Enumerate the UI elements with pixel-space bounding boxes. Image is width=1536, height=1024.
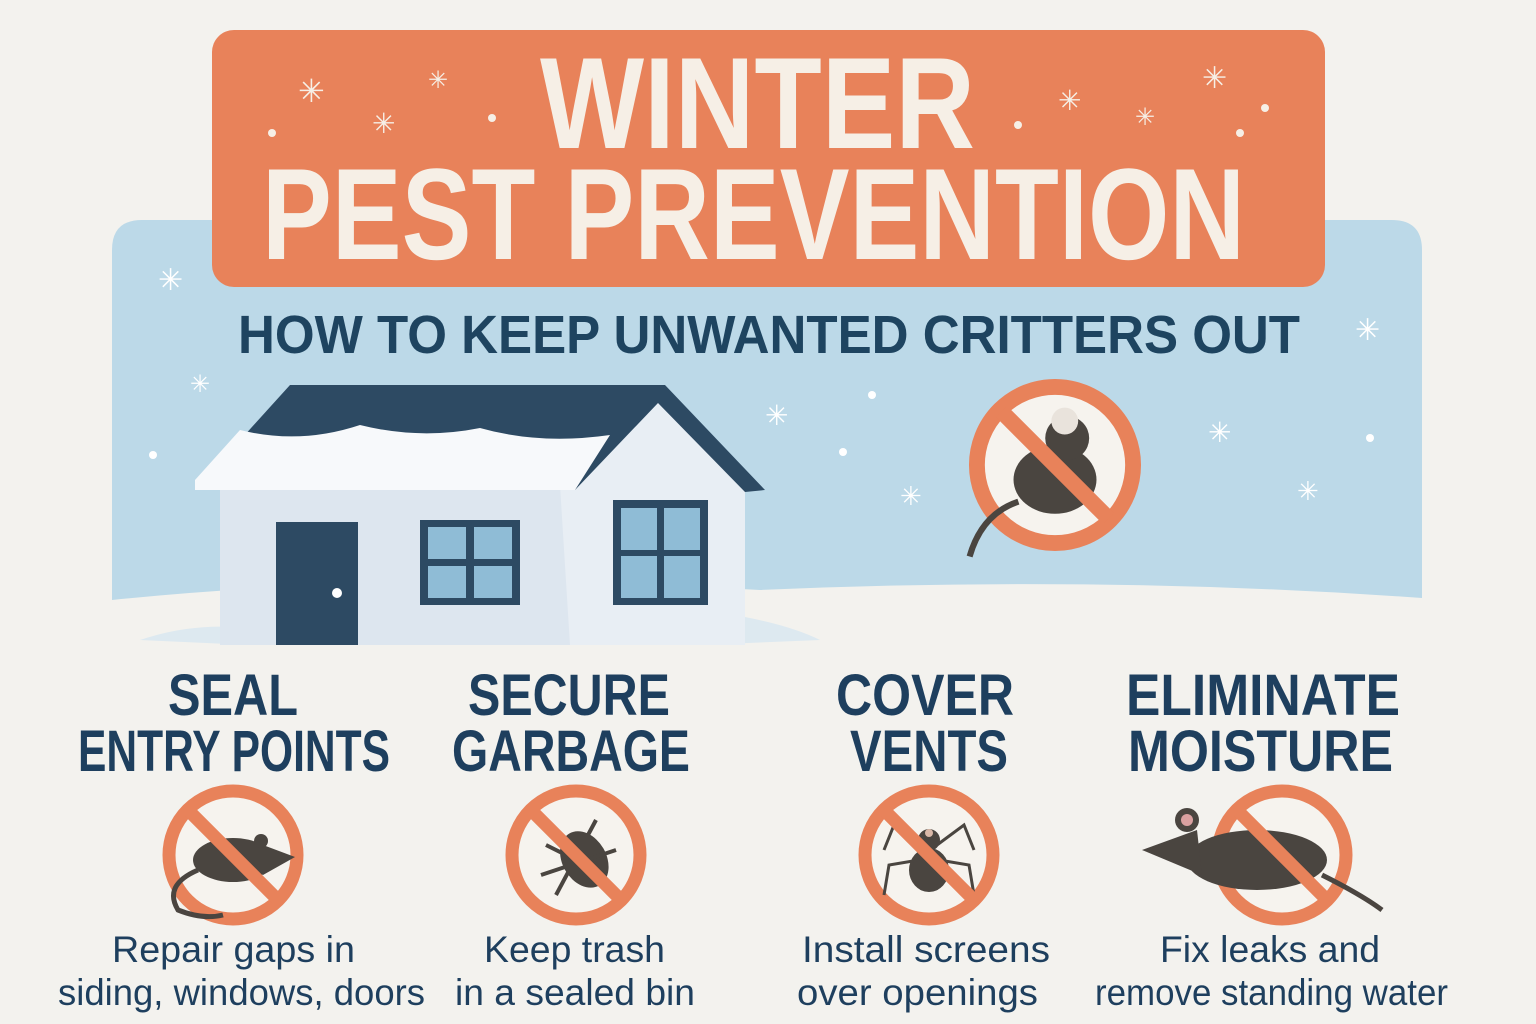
panel: winter sky: ✳ — [900, 481, 922, 511]
column: secure garbage: in a sealed bin — [455, 972, 695, 1013]
column: eliminate moisture — [1095, 663, 1448, 1013]
title banner: PEST PREVENTION — [262, 141, 1245, 287]
icon: no cockroach — [512, 791, 640, 919]
title banner: WINTER — [540, 30, 975, 176]
subtitle: HOW TO KEEP UNWANTED CRITTERS OUT — [238, 305, 1300, 365]
column: eliminate moisture: ELIMINATE — [1126, 663, 1400, 728]
column: cover vents: VENTS — [850, 719, 1008, 784]
column: secure garbage: GARBAGE — [452, 719, 690, 784]
column: eliminate moisture: Fix leaks and — [1160, 929, 1380, 970]
title banner: ✳ — [372, 108, 395, 139]
panel: winter sky — [112, 220, 1422, 650]
icon: no rat — [169, 791, 297, 919]
column: seal entry points: siding, windows, doors — [58, 972, 425, 1013]
title banner: ✳ — [298, 73, 325, 109]
panel: winter sky: ✳ — [190, 371, 210, 398]
icon: no spider — [865, 791, 993, 919]
column: cover vents: COVER — [836, 663, 1014, 728]
column: cover vents — [797, 663, 1050, 1013]
column: seal entry points: Repair gaps in — [112, 929, 355, 970]
column: seal entry points: SEAL — [168, 663, 298, 728]
column: cover vents: over openings — [797, 972, 1038, 1013]
column: eliminate moisture: MOISTURE — [1128, 719, 1393, 784]
title banner: ✳ — [428, 67, 448, 94]
panel: winter sky: ✳ — [765, 400, 788, 431]
column: seal entry points — [58, 663, 425, 1013]
title banner: ✳ — [1058, 85, 1081, 116]
icon: no rat large — [1142, 791, 1382, 919]
title banner: ✳ — [1202, 62, 1227, 95]
panel: winter sky: ✳ — [1297, 476, 1319, 506]
column: secure garbage: SECURE — [468, 663, 670, 728]
icon: no mouse (hero) — [970, 387, 1133, 556]
panel: winter sky: ✳ — [1208, 417, 1231, 448]
column: secure garbage — [452, 663, 695, 1013]
column: eliminate moisture: remove standing water — [1095, 972, 1448, 1013]
title banner: ✳ — [1135, 104, 1155, 131]
title banner — [212, 30, 1325, 287]
column: secure garbage: Keep trash — [484, 929, 665, 970]
panel: winter sky: ✳ — [1355, 314, 1380, 347]
column: seal entry points: ENTRY POINTS — [78, 719, 390, 784]
column: cover vents: Install screens — [802, 929, 1050, 970]
panel: winter sky: ✳ — [158, 264, 183, 297]
house illustration — [195, 385, 765, 645]
